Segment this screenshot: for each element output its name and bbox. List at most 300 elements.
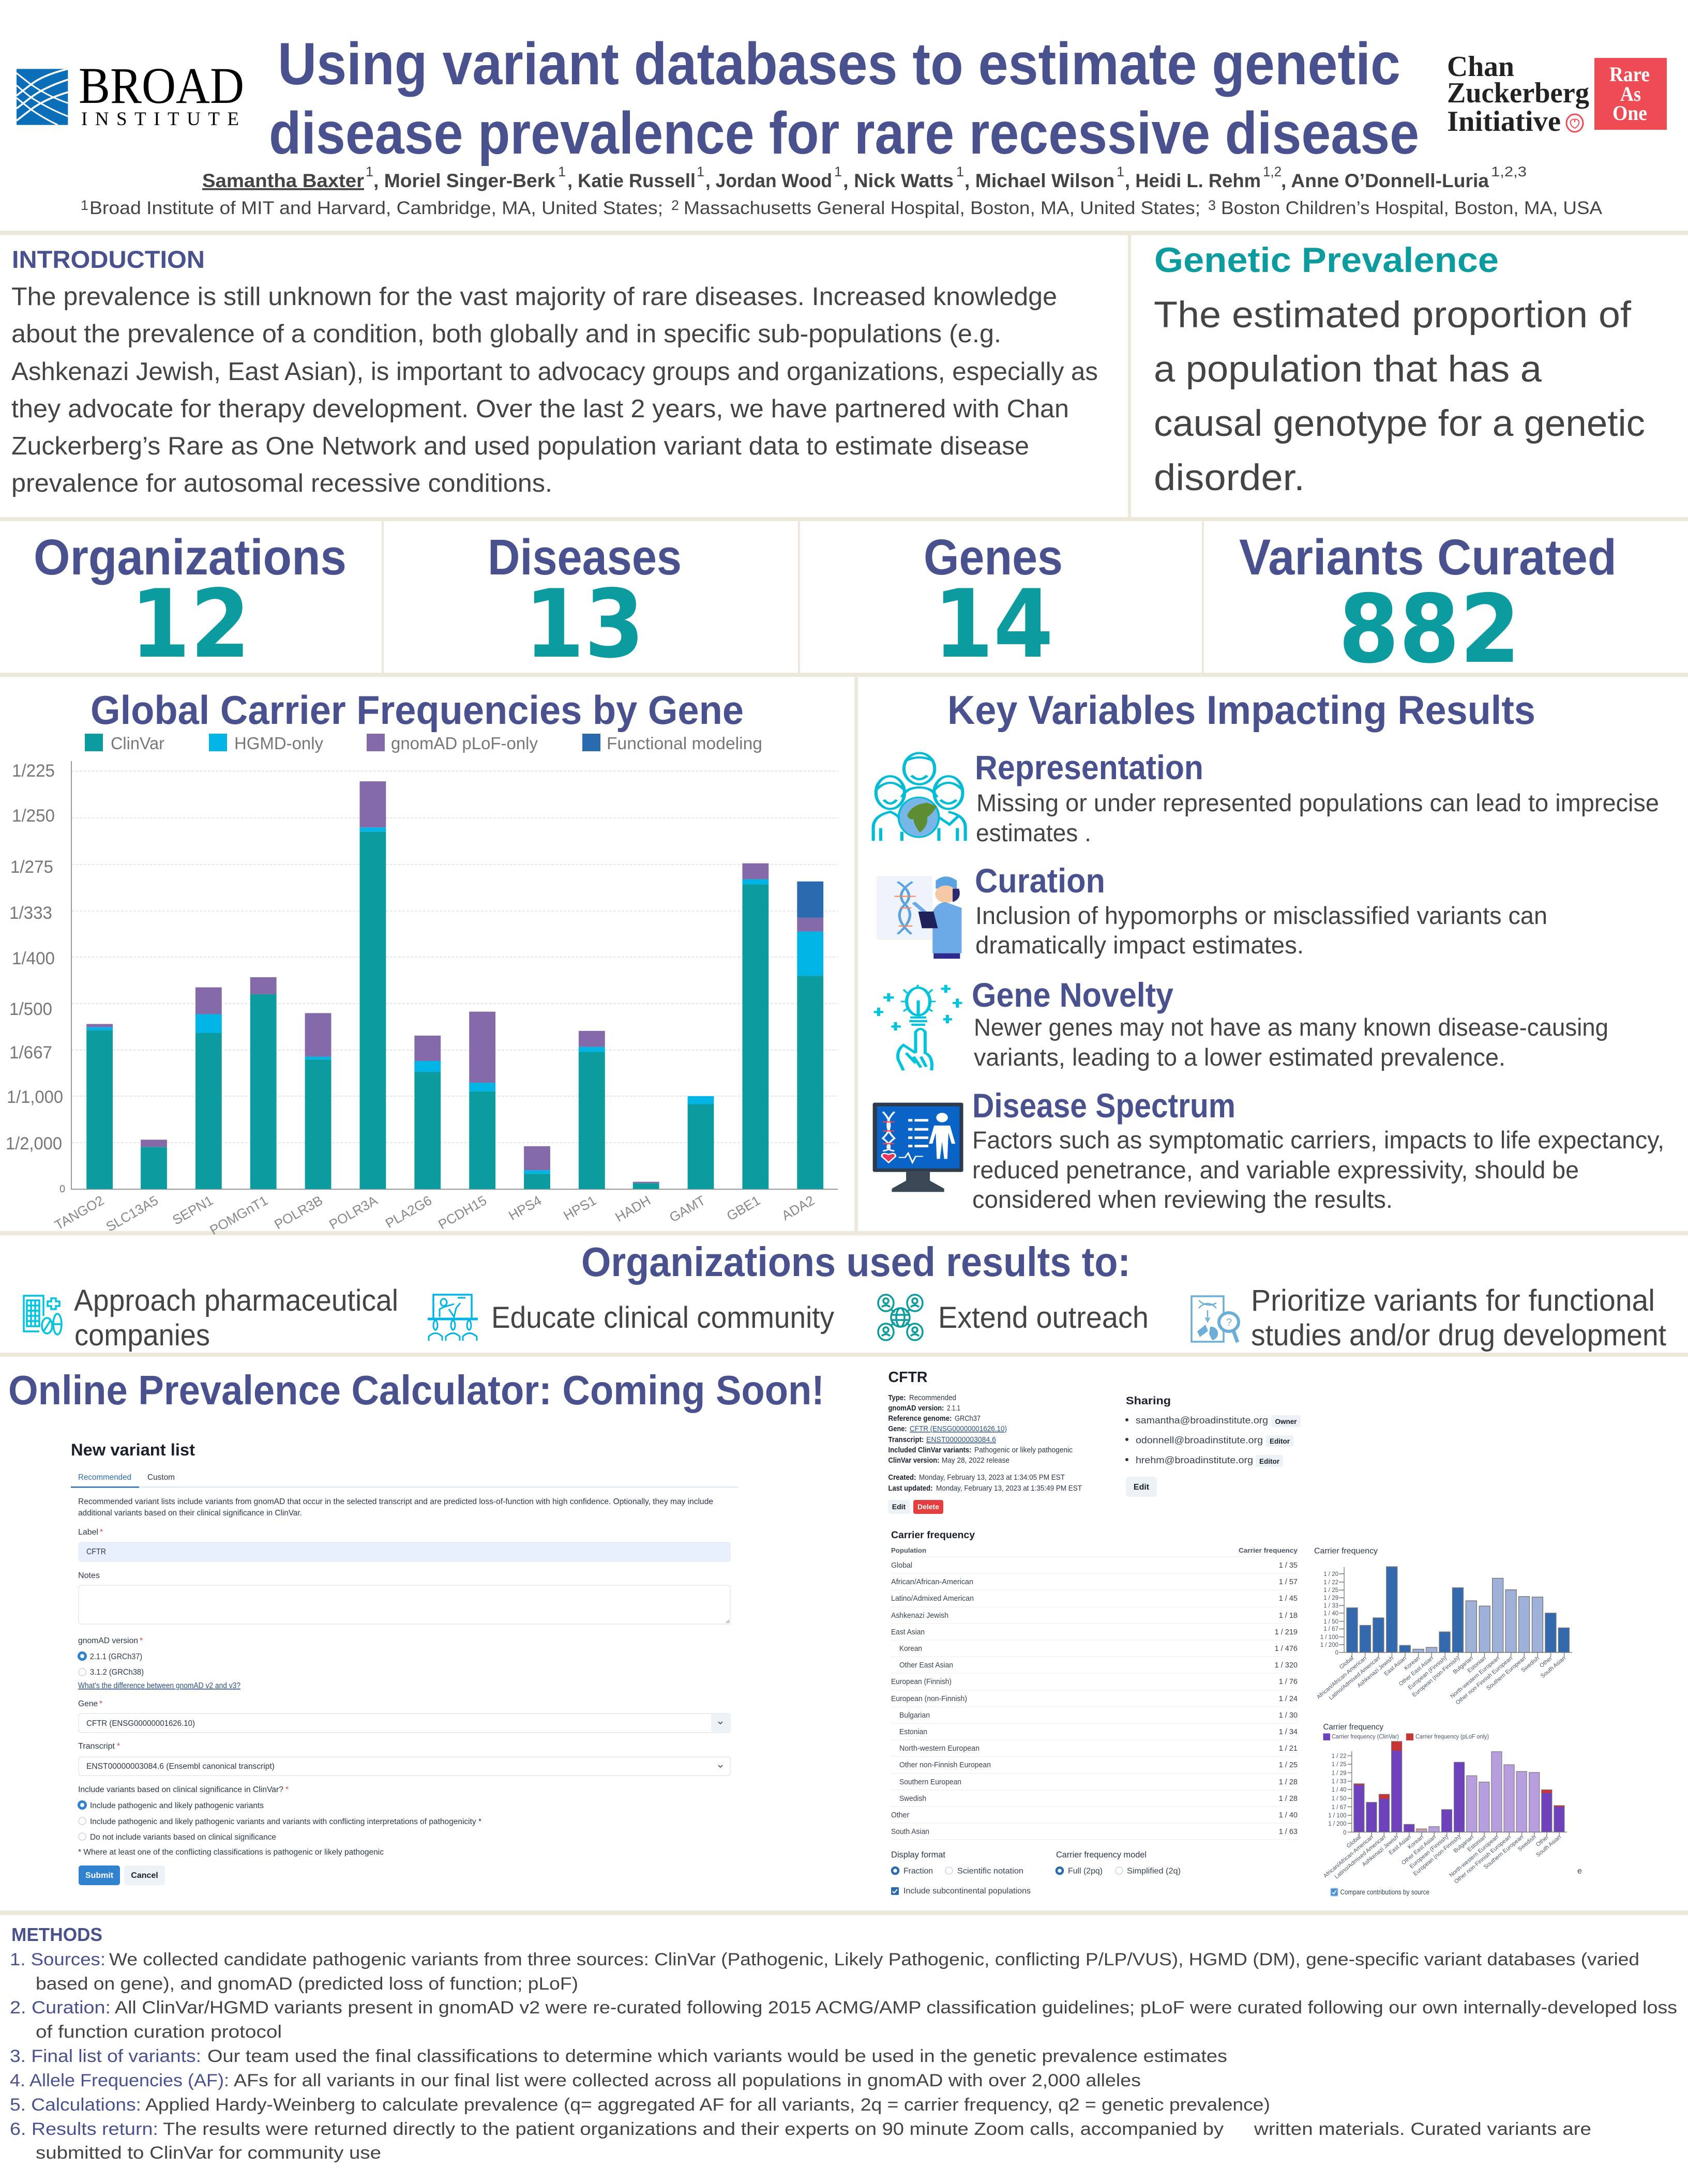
text: extend outreach: Extend outreach — [938, 1301, 1149, 1334]
table: carrier frequency by population: Latino/Admixed American — [891, 1595, 974, 1603]
method 4: allele frequencies: 4. Allele Frequencies (AF): — [10, 2071, 229, 2090]
bar chart: carrier frequency by population: 1 / 20 — [1323, 1571, 1338, 1578]
method 6: results return: written materials. Curated variants are — [1254, 2119, 1591, 2139]
screenshot: new variant list form: Do not include variants based on clinical significance — [90, 1833, 276, 1842]
bar chart: carrier frequency per gene: 1/2,000 — [6, 1134, 62, 1154]
bar chart: carrier frequency contributions by source: 1 / 67 — [1332, 1804, 1347, 1811]
method 5: calculations: Applied Hardy-Weinberg to calculate prevalence (q= aggregated AF for all variants, 2q = carrier frequency, q2 = genetic prevalence) — [145, 2095, 1270, 2115]
bar chart: carrier frequency contributions by source: Compare contributions by source — [1340, 1888, 1429, 1896]
text: introduction body: Zuckerberg’s Rare as One Network and used population variant data to estimate disease — [11, 432, 1029, 460]
screenshot: new variant list form: Include pathogenic and likely pathogenic variants — [90, 1801, 264, 1810]
authors: , Heidi L. Rehm — [1125, 170, 1261, 191]
screenshot: new variant list form: Notes — [78, 1571, 100, 1580]
screenshot: sharing list: Editor — [1270, 1437, 1290, 1445]
title: Using variant databases to estimate genetic — [278, 31, 1400, 97]
screenshot: CFTR variant list details: Monday, February 13, 2023 at 1:35:49 PM EST — [936, 1484, 1082, 1493]
screenshot: sharing list: Owner — [1275, 1418, 1297, 1425]
screenshot: CFTR variant list details: Type: — [888, 1394, 906, 1402]
authors: 1,2,3 — [1491, 164, 1527, 179]
bar chart: carrier frequency contributions by source: 1 / 29 — [1332, 1770, 1347, 1777]
bar chart: carrier frequency per gene: GBE1 — [724, 1192, 763, 1224]
method 1: sources: 1. Sources: — [10, 1950, 106, 1969]
screenshot: new variant list form: * — [285, 1785, 289, 1794]
icon: network of people around globe — [878, 1295, 923, 1340]
table: carrier frequency by population: Other non-Finnish European — [899, 1761, 991, 1769]
authors: 1 — [1117, 164, 1124, 179]
logo: Chan Zuckerberg Initiative: Zuckerberg — [1447, 77, 1589, 109]
affiliations — [81, 198, 1603, 218]
stat: genes 14: Genes — [924, 529, 1063, 585]
stat: variants curated 882 — [1239, 529, 1617, 684]
stat: diseases 13: Diseases — [488, 529, 682, 585]
panel: methods — [10, 1924, 1677, 2163]
text: definition: a population that has a — [1154, 349, 1542, 390]
legend: ClinVar — [111, 734, 164, 753]
screenshot: new variant list form: CFTR (ENSG00000001626.10) — [86, 1719, 195, 1728]
method 3: final list of variants: Our team used the final classifications to determine which variants would be used in the genetic prevalence estimates — [207, 2046, 1227, 2066]
screenshot: new variant list form: * — [99, 1700, 102, 1708]
screenshot: CFTR variant list details: Delete — [917, 1503, 939, 1511]
logo: Chan Zuckerberg Initiative — [1447, 51, 1589, 138]
logo: Chan Zuckerberg Initiative: Chan — [1447, 51, 1514, 83]
screenshot: CFTR variant list details: Included ClinVar variants: — [888, 1446, 971, 1454]
table: carrier frequency by population: North-western European — [899, 1745, 979, 1753]
title: disease prevalence for rare recessive disease — [269, 100, 1419, 166]
stat: organizations 12: Organizations — [34, 529, 346, 585]
authors: , Katie Russell — [567, 170, 696, 191]
text: introduction body — [11, 283, 1098, 497]
table: carrier frequency by population: African/African-American — [891, 1578, 973, 1586]
bar chart: carrier frequency contributions by source: 1 / 25 — [1332, 1762, 1347, 1768]
affiliations: 2 — [671, 198, 679, 213]
bar chart: carrier frequency per gene: 1/250 — [12, 806, 55, 826]
bar chart: carrier frequency by population: Latino/Admixed American — [1328, 1655, 1381, 1701]
bar chart: carrier frequency contributions by source: 1 / 22 — [1332, 1753, 1347, 1760]
bar chart: carrier frequency by population: European (Finnish) — [1407, 1655, 1448, 1691]
legend — [85, 734, 762, 753]
bar chart: carrier frequency contributions by source: Carrier frequency (pLoF only) — [1415, 1734, 1489, 1740]
screenshot: CFTR variant list details: Reference genome: — [888, 1415, 952, 1423]
text: disease spectrum: Factors such as symptomatic carriers, impacts to life expectancy, — [972, 1126, 1664, 1154]
screenshot: sharing list: Sharing — [1126, 1395, 1171, 1407]
text: gene novelty: Gene Novelty — [972, 976, 1173, 1014]
bar chart: carrier frequency by population: European (non-Finnish) — [1411, 1655, 1461, 1698]
affiliations: 3 — [1208, 198, 1216, 213]
bar chart: carrier frequency contributions by source — [1322, 1723, 1582, 1896]
screenshot: CFTR variant list details — [888, 1369, 1082, 1514]
bar chart: carrier frequency contributions by source: East Asian — [1388, 1834, 1412, 1856]
authors: , Moriel Singer-Berk — [373, 170, 555, 191]
text: prioritize variants: Prioritize variants for functional — [1251, 1284, 1655, 1317]
bar chart: carrier frequency by population: East Asian — [1383, 1655, 1408, 1677]
screenshot: sharing list: Editor — [1259, 1458, 1280, 1465]
bar chart: carrier frequency by population: Korean — [1403, 1655, 1421, 1672]
bar chart: carrier frequency by population: North-western European — [1449, 1655, 1501, 1700]
controls: display format and frequency model — [891, 1850, 1181, 1895]
screenshot: CFTR variant list details: CFTR — [888, 1369, 928, 1386]
screenshot: new variant list form: What's the difference between gnomAD v2 and v3? — [78, 1681, 240, 1690]
controls: display format and frequency model: Scientific notation — [957, 1867, 1023, 1876]
screenshot: new variant list form: * Where at least one of the conflicting classifications is pathogenic or likely pathogenic — [78, 1848, 384, 1857]
screenshot: CFTR variant list details: Recommended — [909, 1394, 956, 1402]
method 2: curation: 2. Curation: — [10, 1998, 111, 2018]
controls: display format and frequency model: Fraction — [903, 1867, 933, 1876]
authors: 1 — [366, 164, 373, 179]
screenshot: new variant list form: CFTR — [86, 1548, 106, 1556]
table: carrier frequency by population: Carrier frequency — [891, 1530, 975, 1541]
method 2: curation: of function curation protocol — [36, 2022, 282, 2042]
bar chart: carrier frequency by population: 0 — [1335, 1650, 1338, 1656]
text: definition — [1154, 295, 1645, 498]
text: introduction body: about the prevalence of a condition, both globally and in specific sub-populations (e.g. — [11, 320, 1001, 348]
table: carrier frequency by population: 1 / 57 — [1279, 1578, 1298, 1586]
stat: genes 14 — [924, 529, 1063, 679]
icon: light bulb with raised finger — [874, 985, 962, 1070]
screenshot: CFTR variant list details: Transcript: — [888, 1436, 924, 1444]
table: carrier frequency by population: 1 / 35 — [1279, 1561, 1298, 1570]
bar chart: carrier frequency per gene: 1/275 — [10, 857, 53, 877]
text: gene novelty: Newer genes may not have as many known disease-causing — [974, 1013, 1608, 1041]
screenshot: CFTR variant list details: Pathogenic or likely pathogenic — [974, 1446, 1073, 1454]
stat: organizations 12 — [34, 529, 346, 679]
bar chart: carrier frequency per gene: 1/400 — [12, 949, 55, 968]
table: carrier frequency by population: 1 / 320 — [1275, 1661, 1298, 1670]
authors: 1 — [956, 164, 964, 179]
authors: Samantha Baxter — [202, 170, 364, 191]
screenshot: new variant list form: 2.1.1 (GRCh37) — [90, 1652, 142, 1661]
bar chart: carrier frequency by population: Other — [1539, 1655, 1554, 1669]
authors: , Jordan Wood — [705, 170, 832, 191]
authors: 1 — [558, 164, 566, 179]
bar chart: carrier frequency per gene: SEPN1 — [170, 1192, 216, 1228]
bar chart: carrier frequency per gene: ADA2 — [779, 1192, 817, 1223]
bar chart: carrier frequency per gene: 1/1,000 — [7, 1087, 63, 1107]
bar chart: carrier frequency contributions by source: 1 / 200 — [1328, 1821, 1347, 1827]
screenshot: new variant list form: * — [117, 1742, 120, 1751]
table: carrier frequency by population: Swedish — [899, 1795, 926, 1803]
authors: , Anne O’Donnell-Luria — [1281, 170, 1489, 191]
bar chart: carrier frequency by population: Global — [1338, 1655, 1355, 1671]
bar chart: carrier frequency per gene: 1/500 — [9, 999, 52, 1019]
table: carrier frequency by population: East Asian — [891, 1628, 925, 1636]
controls: display format and frequency model: Simplified (2q) — [1127, 1867, 1181, 1876]
bar chart: carrier frequency by population: 1 / 100 — [1320, 1634, 1338, 1641]
screenshot: CFTR variant list details: GRCh37 — [955, 1415, 981, 1423]
bar chart: carrier frequency per gene: PCDH15 — [435, 1192, 489, 1232]
bar chart: carrier frequency contributions by source: 1 / 33 — [1332, 1779, 1347, 1785]
heading: online prevalence calculator: Online Prevalence Calculator: Coming Soon! — [8, 1367, 824, 1413]
screenshot: new variant list form: * — [140, 1636, 143, 1645]
method 3: final list of variants: 3. Final list of variants: — [10, 2046, 201, 2066]
bar chart: carrier frequency contributions by source: Korean — [1407, 1834, 1425, 1851]
bar chart: carrier frequency contributions by source: Ashkenazi Jewish — [1361, 1834, 1399, 1868]
bar chart: carrier frequency per gene: POLR3A — [326, 1192, 381, 1233]
header logo: Broad Institute — [17, 57, 244, 130]
controls: display format and frequency model: Display format — [891, 1850, 945, 1859]
method 1: sources — [10, 1950, 1639, 1994]
bar chart: carrier frequency by population: 1 / 50 — [1323, 1619, 1338, 1625]
table: carrier frequency by population: 1 / 219 — [1275, 1628, 1298, 1636]
logo: Rare As One: Rare — [1609, 63, 1650, 86]
text: representation: Representation — [975, 748, 1203, 786]
bar chart: carrier frequency by population — [1314, 1547, 1572, 1706]
bar chart: carrier frequency per gene: GAMT — [667, 1192, 708, 1225]
bar chart: carrier frequency by population: 1 / 200 — [1320, 1642, 1338, 1648]
screenshot: new variant list form: Custom — [147, 1473, 175, 1482]
screenshot: sharing list: samantha@broadinstitute.org — [1136, 1415, 1268, 1425]
method 1: sources: We collected candidate pathogenic variants from three sources: ClinVar (Pathogenic, Likely Pathogenic, conflicting P/LP/VUS), HGMD (DM), gene-specific variant databases (varied — [109, 1950, 1639, 1969]
screenshot: CFTR variant list details: 2.1.1 — [947, 1404, 960, 1413]
controls: display format and frequency model: Full (2pq) — [1068, 1867, 1103, 1876]
screenshot: new variant list form: Submit — [85, 1871, 114, 1880]
method 1: sources: based on gene), and gnomAD (predicted loss of function; pLoF) — [36, 1974, 578, 1994]
table: carrier frequency by population: Southern European — [899, 1778, 961, 1786]
logo sub wordmark: INSTITUTE — [81, 109, 239, 130]
affiliations: Boston Children’s Hospital, Boston, MA, USA — [1221, 198, 1603, 218]
bar chart: carrier frequency contributions by source: Carrier frequency — [1323, 1723, 1383, 1732]
panel: genetic prevalence definition — [1154, 240, 1645, 498]
legend: gnomAD pLoF-only — [391, 734, 538, 753]
table: carrier frequency by population: 1 / 30 — [1279, 1711, 1298, 1720]
affiliations: Broad Institute of MIT and Harvard, Cambridge, MA, United States; — [89, 198, 663, 218]
method 2: curation: All ClinVar/HGMD variants present in gnomAD v2 were re-curated following 2015 ACMG/AMP classification guidelines; pLoF were curated following our own internally-developed loss — [115, 1998, 1677, 2018]
bar chart: carrier frequency by population: South Asian — [1540, 1655, 1567, 1679]
bar chart: carrier frequency contributions by source: 1 / 50 — [1332, 1796, 1347, 1802]
text: definition: disorder. — [1154, 458, 1305, 498]
bar chart: carrier frequency per gene: HPS4 — [506, 1192, 544, 1223]
panel: global carrier frequencies — [6, 687, 838, 1238]
bar chart: carrier frequency by population: Bulgarian — [1452, 1655, 1474, 1675]
screenshot: new variant list form: Recommended variant lists include variants from gnomAD that occur in the selected transcript and are predicted loss-of-function with high confidence. Optionally, they may include — [78, 1497, 713, 1506]
method 2: curation — [10, 1998, 1677, 2042]
heading: genetic prevalence: Genetic Prevalence — [1154, 240, 1499, 280]
bar chart: carrier frequency by population: Swedish — [1520, 1655, 1541, 1674]
table: carrier frequency by population: 1 / 45 — [1279, 1595, 1298, 1603]
text: curation: Curation — [975, 861, 1105, 900]
bar chart: carrier frequency contributions by source: European (Finnish) — [1409, 1834, 1450, 1870]
screenshot: new variant list form — [71, 1440, 738, 1885]
bar chart: carrier frequency contributions by source: Estonian — [1466, 1834, 1487, 1853]
text: representation: estimates . — [976, 819, 1091, 846]
text: introduction body: The prevalence is still unknown for the vast majority of rare diseases. Increased knowledge — [11, 283, 1057, 311]
table: carrier frequency by population: 1 / 28 — [1279, 1795, 1298, 1803]
table: carrier frequency by population: Global — [891, 1561, 912, 1570]
bar chart: carrier frequency per gene: SLC13A5 — [103, 1192, 161, 1235]
panel: organizations used results to — [24, 1239, 1666, 1352]
text: educate clinical community: Educate clinical community — [491, 1301, 834, 1334]
bar chart: carrier frequency contributions by source: North-western European — [1448, 1834, 1500, 1878]
screenshot: CFTR variant list details: ClinVar version: — [888, 1457, 939, 1465]
text: introduction body: they advocate for therapy development. Over the last 2 years, we have partnered with Chan — [11, 395, 1069, 423]
bar chart: carrier frequency contributions by source: African/African-American — [1322, 1834, 1375, 1879]
bar chart: carrier frequency by population: 1 / 67 — [1323, 1626, 1338, 1632]
screenshot: CFTR variant list details: CFTR (ENSG00000001626.10) — [910, 1425, 1007, 1433]
bar chart: carrier frequency per gene — [6, 761, 838, 1238]
bar chart: carrier frequency per gene: POLR3B — [272, 1192, 325, 1233]
method 6: results return: The results were returned directly to the patient organizations and their experts on 90 minute Zoom calls, accompanied by — [163, 2119, 1224, 2139]
text: gene novelty — [972, 976, 1608, 1071]
authors: 1,2 — [1263, 164, 1282, 179]
screenshot: new variant list form: * — [100, 1528, 103, 1537]
text: representation — [975, 748, 1659, 846]
table: carrier frequency by population: 1 / 21 — [1279, 1745, 1298, 1753]
bar chart: carrier frequency per gene: POMGnT1 — [207, 1192, 270, 1238]
table: carrier frequency by population: South Asian — [891, 1828, 929, 1836]
bar chart: carrier frequency contributions by source: 1 / 100 — [1328, 1813, 1347, 1819]
icon: DNA to drug with magnifier: ? — [1226, 1317, 1232, 1328]
icon: Broad mark — [17, 69, 68, 125]
text: approach pharmaceutical companies — [74, 1284, 398, 1352]
bar chart: carrier frequency contributions by source: Other non-Finnish European — [1453, 1834, 1512, 1885]
text: definition: causal genotype for a genetic — [1154, 403, 1645, 444]
heading: organizations used results: Organizations used results to: — [581, 1239, 1131, 1285]
panel: key variables impacting results — [873, 687, 1664, 1213]
screenshot: CFTR variant list details: ENST00000003084.6 — [926, 1436, 996, 1444]
bar chart: carrier frequency contributions by source: Swedish — [1517, 1834, 1537, 1853]
table: carrier frequency by population: 1 / 18 — [1279, 1612, 1298, 1620]
controls: display format and frequency model: Include subcontinental populations — [903, 1887, 1031, 1895]
text: approach pharmaceutical companies: companies — [74, 1318, 210, 1352]
method 5: calculations: 5. Calculations: — [10, 2095, 141, 2115]
bar chart: carrier frequency contributions by source: Other East Asian — [1400, 1834, 1437, 1866]
bar chart: carrier frequency per gene: 1/225 — [12, 761, 55, 781]
authors: , Nick Watts — [843, 170, 954, 191]
table: carrier frequency by population: 1 / 24 — [1279, 1695, 1298, 1703]
screenshot: sharing list: hrehm@broadinstitute.org — [1136, 1455, 1253, 1465]
controls: display format and frequency model: Carrier frequency model — [1056, 1850, 1147, 1859]
bar chart: carrier frequency per gene: HPS1 — [561, 1192, 599, 1223]
screenshot: new variant list form: Recommended — [78, 1473, 131, 1482]
icon: people with globe — [873, 753, 966, 841]
text: disease spectrum: Disease Spectrum — [972, 1086, 1235, 1125]
text: representation: Missing or under represented populations can lead to imprecise — [976, 789, 1659, 816]
bar chart: carrier frequency by population: Ashkenazi Jewish — [1356, 1655, 1395, 1689]
text: disease spectrum — [972, 1086, 1664, 1213]
screenshot: new variant list form: New variant list — [71, 1440, 195, 1459]
screenshot: new variant list form: 3.1.2 (GRCh38) — [90, 1668, 144, 1677]
table: carrier frequency by population: 1 / 40 — [1279, 1811, 1298, 1819]
bar chart: carrier frequency contributions by source: 1 / 40 — [1332, 1787, 1347, 1793]
method 6: results return: submitted to ClinVar for community use — [36, 2143, 381, 2163]
authors: 1 — [697, 164, 704, 179]
screenshot: new variant list form: Include variants based on clinical significance in ClinVar? — [78, 1785, 283, 1794]
bar chart: carrier frequency contributions by source: European (non-Finnish) — [1412, 1834, 1462, 1877]
icon: teacher and audience — [428, 1295, 478, 1341]
table: carrier frequency by population: 1 / 34 — [1279, 1728, 1298, 1736]
bar chart: carrier frequency by population: 1 / 33 — [1323, 1603, 1338, 1609]
method 6: results return — [10, 2119, 1591, 2163]
bar chart: carrier frequency per gene: PLA2G6 — [383, 1192, 434, 1231]
screenshot: CFTR variant list details: May 28, 2022 release — [942, 1457, 1009, 1465]
screenshot: CFTR variant list details: Monday, February 13, 2023 at 1:34:05 PM EST — [919, 1474, 1065, 1482]
screenshot: CFTR variant list details: Created: — [888, 1474, 916, 1482]
logo: Rare As One: One — [1612, 101, 1647, 125]
logo: Chan Zuckerberg Initiative: Initiative — [1447, 105, 1561, 138]
bar chart: carrier frequency contributions by source: Other — [1535, 1834, 1550, 1848]
bar chart: carrier frequency by population: 1 / 22 — [1323, 1580, 1338, 1586]
authors: 1 — [834, 164, 842, 179]
table: carrier frequency by population: Bulgarian — [899, 1711, 930, 1720]
text: prioritize variants: studies and/or drug development — [1251, 1318, 1666, 1352]
bar chart: carrier frequency contributions by source: Latino/Admixed American — [1334, 1834, 1387, 1880]
table: carrier frequency by population: European (non-Finnish) — [891, 1695, 967, 1703]
bar chart: carrier frequency by population: Southern European — [1485, 1655, 1527, 1692]
affiliations: 1 — [81, 198, 88, 213]
logo: Rare As One: As — [1620, 82, 1641, 105]
screenshot: sharing list — [1125, 1395, 1301, 1497]
method 4: allele frequencies: AFs for all variants in our final list were collected across all populations in gnomAD with over 2,000 alleles — [234, 2071, 1141, 2090]
heading: global carrier frequencies: Global Carrier Frequencies by Gene — [91, 687, 744, 733]
text: curation — [975, 861, 1547, 959]
heading: methods: METHODS — [11, 1924, 102, 1945]
icon: DNA to drug with magnifier — [1192, 1296, 1239, 1342]
panel: online prevalence calculator — [8, 1367, 1582, 1896]
table: carrier frequency by population — [891, 1530, 1298, 1840]
icon: curator with DNA — [877, 876, 961, 959]
bar chart: carrier frequency contributions by source: Global — [1346, 1834, 1362, 1849]
table: carrier frequency by population: Other — [891, 1811, 909, 1819]
screenshot: new variant list form: Label — [78, 1528, 98, 1537]
title — [269, 31, 1419, 166]
text: prioritize variants — [1251, 1284, 1666, 1352]
stat: organizations 12: 12 — [130, 569, 250, 679]
bar chart: carrier frequency per gene: 1/333 — [9, 903, 52, 923]
table: carrier frequency by population: Korean — [899, 1645, 922, 1653]
table: carrier frequency by population: Other East Asian — [899, 1661, 953, 1670]
text: introduction body: Ashkenazi Jewish, East Asian), is important to advocacy groups and organizations, especially as — [11, 358, 1098, 386]
screenshot: new variant list form: ENST00000003084.6 (Ensembl canonical transcript) — [86, 1762, 275, 1771]
logo: Rare As One — [1594, 58, 1667, 130]
legend: Functional modeling — [607, 734, 762, 753]
screenshot: new variant list form: Transcript — [78, 1742, 115, 1751]
bar chart: carrier frequency by population: 1 / 40 — [1323, 1611, 1338, 1617]
text: curation: dramatically impact estimates. — [975, 931, 1304, 959]
stat: genes 14: 14 — [933, 569, 1053, 679]
text: disease spectrum: reduced penetrance, and variable expressivity, should be — [972, 1156, 1579, 1184]
text: approach pharmaceutical companies: Approach pharmaceutical — [74, 1284, 398, 1317]
table: carrier frequency by population: European (Finnish) — [891, 1678, 952, 1686]
icon: pharmaceutical building and pills — [24, 1296, 62, 1334]
screenshot: new variant list form: Include pathogenic and likely pathogenic variants and variants with conflicting interpretations of pathogenicity * — [90, 1817, 481, 1826]
bar chart: carrier frequency contributions by source: Southern European — [1483, 1834, 1525, 1871]
screenshot: CFTR variant list details: Last updated: — [888, 1484, 933, 1493]
table: carrier frequency by population: 1 / 76 — [1279, 1678, 1298, 1686]
screenshot: new variant list form: Cancel — [131, 1871, 158, 1880]
bar chart: carrier frequency contributions by source: Bulgarian — [1453, 1834, 1475, 1854]
bar chart: carrier frequency per gene: 0 — [59, 1184, 65, 1195]
screenshot: new variant list form: additional variants based on their clinical significance in ClinVar. — [78, 1509, 302, 1518]
stat: diseases 13 — [488, 529, 682, 679]
legend: HGMD-only — [234, 734, 323, 753]
screenshot: sharing list: Edit — [1134, 1483, 1150, 1492]
table: carrier frequency by population: Carrier frequency — [1239, 1546, 1298, 1554]
screenshot: new variant list form: gnomAD version — [78, 1636, 138, 1645]
authors — [202, 164, 1527, 191]
screenshot: CFTR variant list details: Gene: — [888, 1425, 907, 1433]
bar chart: carrier frequency contributions by source: South Asian — [1535, 1834, 1562, 1858]
bar chart: carrier frequency per gene: 1/667 — [9, 1043, 52, 1063]
text: introduction body: prevalence for autosomal recessive conditions. — [11, 469, 552, 497]
bar chart: carrier frequency per gene: HADH — [612, 1192, 653, 1225]
bar chart: carrier frequency by population: 1 / 25 — [1323, 1587, 1338, 1594]
stat: variants curated 882: 882 — [1338, 574, 1520, 684]
table: carrier frequency by population: 1 / 28 — [1279, 1778, 1298, 1786]
bar chart: carrier frequency contributions by source: e — [1577, 1867, 1582, 1876]
bar chart: carrier frequency per gene: TANGO2 — [52, 1192, 107, 1233]
text: definition: The estimated proportion of — [1154, 295, 1631, 336]
bar chart: carrier frequency contributions by source: 0 — [1343, 1830, 1347, 1836]
text: curation: Inclusion of hypomorphs or misclassified variants can — [975, 902, 1547, 929]
